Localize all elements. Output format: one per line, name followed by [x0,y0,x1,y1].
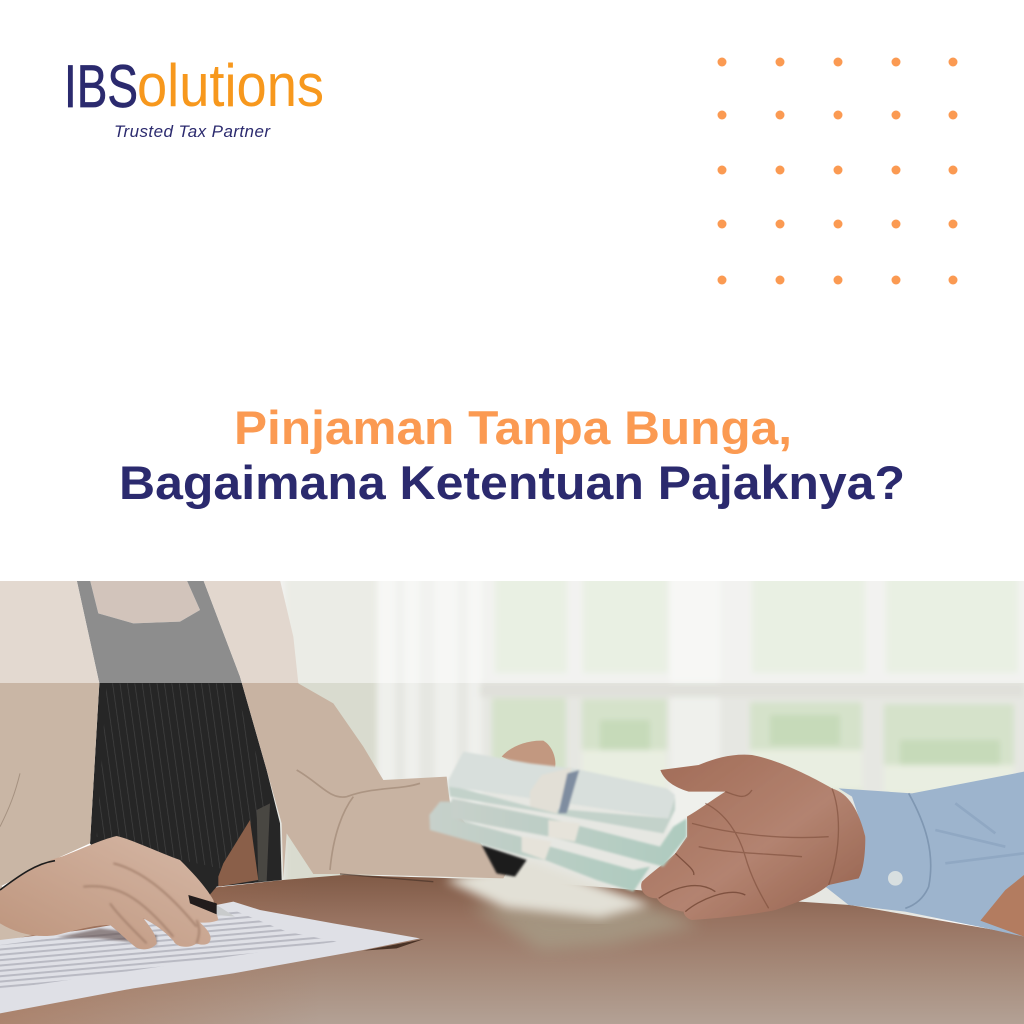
paper and writing hand [0,836,424,1013]
translucent white top band [0,581,1024,683]
paper band 2 [548,820,580,842]
title [119,401,905,509]
cuff button [888,871,903,886]
table reflection of money, soft [470,905,700,950]
middle stack [452,798,687,867]
paper band 1 [530,770,570,814]
sleeve shadow on table [340,874,433,882]
jacket hem [0,883,33,942]
jacket right lapel and sleeve [203,580,512,878]
decorative dot grid [718,58,958,284]
man's arm and shirt [641,755,1024,937]
money stacks [429,741,687,892]
skin at neckline [90,580,200,623]
shirt sleeve [825,772,1024,937]
logo wordmark IBS: IBS [64,53,138,120]
window background [270,570,1024,920]
top stack face [448,752,675,818]
title line 2: Bagaimana Ketentuan Pajaknya? [119,456,905,509]
paper document [0,902,424,1013]
logo: IBSolutions Trusted Tax Partner [64,52,324,141]
other hand at right edge [980,875,1024,937]
paper band 3 [522,837,552,860]
table [0,860,1024,1024]
photo: handing over a stack of money across a table [0,570,1024,1024]
woman [0,580,512,898]
bottom stack [429,802,650,892]
pen [188,895,218,915]
table reflection of money, bright [445,860,650,918]
jacket left panel [0,580,99,887]
top stack side [448,785,675,833]
hand shadow on paper [57,928,157,945]
logo tagline: Trusted Tax Partner [114,122,271,141]
blue strap [558,770,579,813]
woman's fingers on money [502,740,556,768]
woman's dark cuff [482,845,527,877]
logo wordmark olutions: olutions [137,52,324,119]
dark top [77,580,282,898]
man's open hand [641,755,865,920]
hand with pen [0,836,235,949]
title line 1: Pinjaman Tanpa Bunga, [234,401,792,454]
